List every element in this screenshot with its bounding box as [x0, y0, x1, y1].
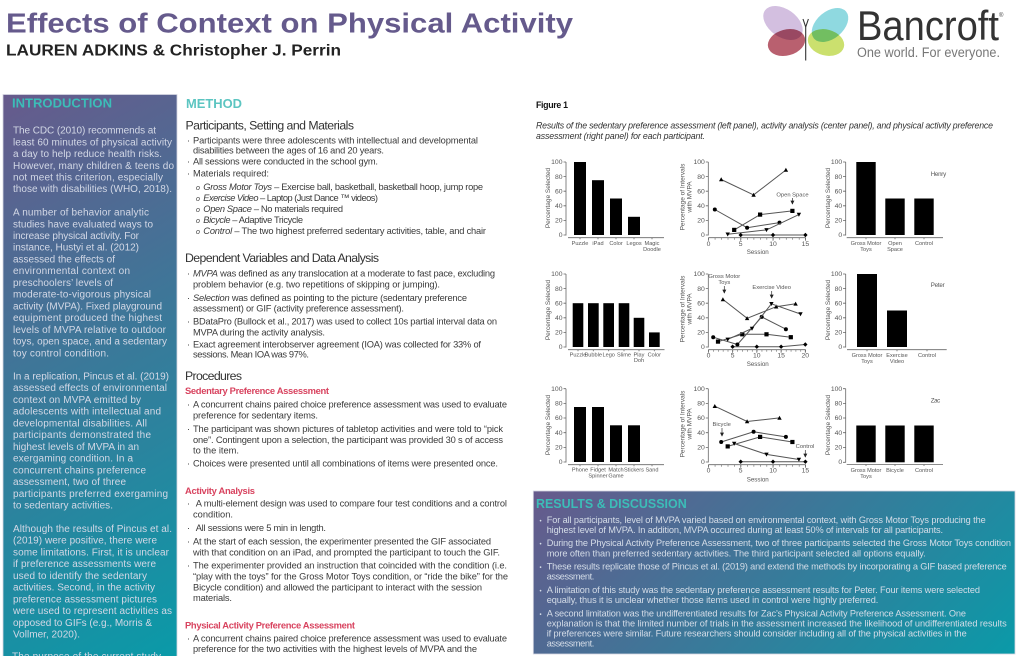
chart: Zac activity analysis: Control [796, 444, 814, 450]
chart: Henry physical activity preference: 60 [835, 188, 842, 195]
dependent variable bullets: Selection was defined as pointing to the picture (sedentary preference [193, 293, 467, 303]
chart: Peter sedentary preference: Lego [602, 353, 615, 359]
chart: Peter activity analysis: with MVPA [686, 293, 694, 326]
chart: Henry sedentary preference: 100 [551, 159, 563, 166]
paragraph: limitations: opposed to GIFs (e.g., Morris & [13, 618, 152, 629]
sedentary bullets [187, 400, 507, 469]
dependent variable bullets: MVPA during the activity analysis. [193, 327, 325, 337]
introduction background [3, 94, 177, 656]
dependent variable bullets: · [187, 317, 190, 327]
paragraph: Pincus replication: highest levels of MVPA in an [13, 442, 139, 453]
result: first limitation [540, 585, 980, 605]
chart: Henry activity analysis: 80 [697, 174, 705, 181]
materials list: Bicycle – Adaptive Tricycle [203, 215, 303, 225]
activity analysis bullets: The experimenter provided an instruction that coincided with the condition (i.e. [193, 560, 507, 570]
logo tagline: One world. For everyone. [857, 45, 1000, 60]
chart: Henry sedentary preference: Puzzle [572, 241, 588, 247]
chart: Peter sedentary preference: Puzzle [570, 353, 586, 359]
chart: Henry physical activity preference: 100 [831, 159, 842, 166]
activity analysis bullets: “play with the toys” for the Gross Motor Toys condition, or “ride the bike” for the [193, 571, 508, 581]
chart: Henry physical activity preference [825, 159, 947, 253]
chart: Henry activity analysis: 0 [707, 241, 711, 248]
chart: Peter physical activity preference: Exercise [886, 353, 908, 359]
paragraph: Pincus replication: concurrent chains preference [13, 466, 146, 476]
sedentary bullets: · [187, 424, 190, 434]
paragraph: Pincus replication: exergaming condition. In a [13, 454, 133, 465]
panel: introduction [3, 94, 177, 656]
chart: Zac activity analysis: 60 [697, 415, 705, 422]
chart: Henry sedentary preference: Percentage Selected [545, 167, 552, 228]
chart: Zac sedentary preference: Stickers [624, 468, 644, 474]
chart: Henry activity analysis: Open Space [776, 192, 809, 198]
chart: Peter sedentary preference: 60 [555, 300, 563, 307]
activity analysis bullets: · [187, 560, 190, 570]
chart: Henry sedentary preference: 40 [555, 203, 563, 210]
dependent variable bullets: BDataPro (Bullock et al., 2017) was used to collect 10s partial interval data on [193, 317, 497, 327]
chart: Peter sedentary preference: Color [648, 353, 661, 359]
activity analysis bullets: · [187, 499, 190, 509]
figure caption: Results of the sedentary preference assessment (left panel), activity analysis (center panel), and physical activity preference [536, 121, 993, 131]
result: preference assessment: • [540, 542, 542, 548]
chart: Zac sedentary preference: 0 [559, 459, 563, 466]
heading: activity analysis: Activity Analysis [185, 485, 255, 496]
chart: Zac activity analysis: 40 [697, 430, 705, 437]
figure heading: Figure 1 [536, 100, 568, 110]
result: preference assessment [540, 538, 1011, 558]
chart: Peter sedentary preference [545, 271, 664, 364]
result: replication: assessment. [547, 571, 594, 581]
chart: Peter sedentary preference: Slime [617, 353, 631, 359]
chart: Zac activity analysis: 5 [739, 468, 743, 474]
logo wordmark: Bancroft [857, 2, 999, 49]
chart: Henry activity analysis: 5 [739, 241, 743, 248]
chart: Peter physical activity preference [825, 271, 947, 365]
heading: method: METHOD [186, 97, 242, 111]
result: first limitation: A limitation of this study was the sedentary preference assessment results for Peter. Four items were selected [547, 585, 980, 595]
chart: Henry physical activity preference: Space [887, 247, 903, 253]
dependent variable bullets: assessment) or GIF (activity preference assessment). [193, 304, 404, 314]
paragraph: limitations: used to identify the sedentary [13, 571, 147, 582]
result: replication [540, 561, 1007, 581]
paragraph: Pincus replication: participants preferred exergaming [13, 489, 168, 500]
result: preference assessment: more often than preferred sedentary activities. The third participant selected all options equally. [547, 548, 926, 558]
chart: Henry physical activity preference: Gross Motor [851, 241, 882, 247]
chart: Peter activity analysis: 20 [802, 353, 809, 360]
chart: Zac sedentary preference: Phone [572, 468, 588, 474]
paragraph: CDC recommendation: However, many children & teens do [13, 161, 174, 172]
chart: Zac sedentary preference: Game [608, 473, 624, 479]
chart: Zac sedentary preference: 80 [555, 401, 563, 408]
dependent variable bullets: · [187, 339, 190, 349]
dependent variable bullets: Exact agreement interobserver agreement (IOA) was collected for 33% of [193, 339, 481, 349]
paragraph: CDC recommendation: The CDC (2010) recommends at [13, 126, 156, 136]
chart: Peter physical activity preference: 60 [835, 300, 842, 307]
chart: Peter sedentary preference: Play [634, 353, 645, 359]
chart: Zac physical activity preference: Control [915, 468, 933, 474]
heading: sedentary preference assessment: Sedentary Preference Assessment [185, 385, 329, 396]
result: MVPA varied by context: For all participants, level of MVPA varied based on environmental context, with Gross Motor Toys producing the [547, 515, 986, 525]
chart: Peter sedentary preference: Doh [634, 358, 644, 364]
chart: Henry activity analysis: 20 [697, 218, 705, 225]
registered mark: ® [999, 12, 1004, 19]
paragraph: Pincus replication: context on MVPA emitted by [13, 395, 141, 406]
materials list: o [196, 185, 200, 192]
chart: Henry activity analysis: Session [747, 249, 769, 256]
chart: Henry physical activity preference: Open [888, 241, 902, 247]
chart: Peter physical activity preference: 40 [835, 315, 842, 322]
chart: Zac activity analysis: 100 [693, 386, 705, 393]
chart: Henry physical activity preference: 20 [835, 218, 842, 225]
heading: introduction: INTRODUCTION [12, 97, 112, 111]
chart: Zac physical activity preference: Toys [860, 474, 872, 480]
paragraph: Pincus replication: adolescents with intellectual and [13, 407, 161, 418]
paragraph: behavior analytic studies: activity (MVPA). Fixed playground [13, 301, 162, 312]
chart: Peter physical activity preference: Percentage Selected [825, 279, 832, 340]
sedentary bullets: preference for sedentary items. [193, 410, 318, 420]
chart: Peter activity analysis: 20 [697, 330, 705, 337]
materials list: Exercise Video – Laptop (Just Dance ™ videos) [203, 193, 378, 203]
activity analysis bullets: A multi-element design was used to compare four test conditions and a control [196, 499, 507, 509]
dependent variable bullets: · [187, 269, 190, 279]
logo: Bancroft [757, 0, 1004, 61]
chart: Henry sedentary preference: Magic [645, 241, 660, 247]
result: MVPA varied by context: highest level of MVPA. In addition, MVPA occurred during at least 50% of intervals for all participants. [547, 525, 943, 535]
chart: Henry sedentary preference: Color [609, 241, 623, 247]
chart: Zac activity analysis: Percentage of Intervals [680, 390, 686, 457]
chart: Henry activity analysis: 0 [701, 232, 705, 239]
chart: Zac activity analysis: with MVPA [686, 408, 694, 441]
sedentary bullets: A concurrent chains paired choice preference assessment was used to evaluate [193, 400, 507, 410]
materials list: o [196, 196, 200, 203]
chart: Zac sedentary preference: Fidget [590, 468, 606, 474]
paragraph: limitations: activities. Second, in the activity [13, 583, 155, 594]
chart: Peter activity analysis: Toys [718, 280, 730, 286]
authors: LAUREN ADKINS & Christopher J. Perrin [6, 42, 341, 60]
chart: Peter activity analysis: Session [747, 361, 769, 368]
paragraph: CDC recommendation: least 60 minutes of physical activity [13, 137, 172, 148]
paragraph: behavior analytic studies: studies have evaluated ways to [13, 219, 153, 230]
paragraph: CDC recommendation: not meet this criterion, especially [13, 172, 163, 184]
chart: Zac physical activity preference: 80 [835, 401, 842, 408]
chart: Peter activity analysis: 0 [707, 353, 711, 360]
chart: Peter sedentary preference: 80 [555, 286, 563, 293]
paragraph: behavior analytic studies: toys, open space, and a sedentary [13, 337, 167, 348]
heading: physical activity preference assessment: Physical Activity Preference Assessment [185, 619, 355, 630]
paragraph: limitations: were used to represent activities as [12, 606, 172, 617]
chart: Peter activity analysis: 5 [731, 353, 735, 360]
paragraph: Pincus replication: In a replication, Pincus et al. (2019) [13, 372, 169, 382]
chart: Peter physical activity preference: Control [918, 353, 936, 359]
result: second limitation [540, 609, 1007, 649]
result: second limitation: assessment. [547, 639, 594, 649]
participants bullets: · [187, 157, 190, 167]
chart: Peter physical activity preference: 100 [831, 271, 842, 278]
chart: Henry sedentary preference: Legos [626, 241, 642, 247]
chart: Zac sedentary preference: 20 [555, 445, 563, 452]
paragraph: limitations: (2019) were positive, there were [13, 536, 157, 547]
chart: Henry activity analysis: 60 [697, 188, 705, 195]
dependent variable bullets: MVPA was defined as any translocation at a moderate to fast pace, excluding [193, 269, 495, 279]
subheading: dependent variables: Dependent Variables and Data Analysis [185, 251, 379, 265]
chart: Henry sedentary preference: 0 [559, 232, 563, 239]
chart: Henry physical activity preference: Henry [931, 171, 947, 178]
paragraph: CDC recommendation: a day to help reduce health risks. [13, 149, 162, 160]
participants bullets: Participants were three adolescents with intellectual and developmental [193, 136, 478, 146]
chart: Henry activity analysis: 15 [802, 241, 809, 248]
figure caption: assessment (right panel) for each participant. [536, 131, 705, 141]
result: first limitation: equally, thus it is unclear whether those items used in control were highly preferred. [547, 595, 878, 605]
result: replication: • [540, 565, 542, 571]
chart: Henry sedentary preference [545, 159, 664, 253]
figure caption [536, 121, 993, 141]
chart: Peter physical activity preference: Toys [861, 359, 873, 365]
sedentary bullets: Choices were presented until all combinations of items were presented once. [193, 459, 498, 469]
chart: Peter activity analysis: 60 [697, 300, 705, 307]
paragraph: Pincus replication: to sedentary activities. [13, 501, 113, 512]
chart: Zac activity analysis: 10 [769, 468, 777, 474]
dependent variable bullets: problem behavior (e.g. two repetitions of skipping or jumping). [193, 279, 440, 289]
chart: Zac physical activity preference: Zac [931, 397, 940, 404]
chart: Peter sedentary preference: Percentage Selected [545, 279, 552, 340]
paragraph: limitations: Although the results of Pincus et al. [13, 524, 172, 535]
chart: Peter activity analysis: 15 [777, 353, 785, 360]
panel: method [185, 97, 508, 654]
chart: Peter activity analysis: 100 [693, 271, 705, 278]
chart: Zac physical activity preference: Percentage Selected [825, 394, 832, 455]
physical activity preference bullets: preference for the two activities with the highest levels of MVPA and the [193, 644, 477, 654]
dependent variable bullets: sessions. Mean IOA was 97%. [193, 350, 309, 360]
chart: Zac physical activity preference: 0 [838, 459, 842, 466]
heading: results and discussion: RESULTS & DISCUSSION [536, 497, 687, 511]
chart: Zac activity analysis: 15 [802, 468, 809, 474]
chart: Henry activity analysis [680, 159, 809, 256]
activity analysis bullets: materials. [193, 593, 232, 603]
chart: Peter sedentary preference: 20 [555, 330, 563, 337]
chart: Henry sedentary preference: iPad [592, 241, 604, 247]
paragraph: Pincus replication: assessed effects of environmental [13, 383, 167, 394]
participants bullets [187, 136, 478, 178]
paragraph: limitations [12, 524, 172, 641]
chart: Zac sedentary preference: 100 [551, 386, 563, 393]
chart: Peter activity analysis: 80 [697, 286, 705, 293]
chart: Peter physical activity preference: 20 [835, 330, 842, 337]
chart: Henry physical activity preference: 80 [835, 174, 842, 181]
chart: Zac sedentary preference: 40 [555, 430, 563, 437]
chart: Peter physical activity preference: Gross Motor [852, 353, 883, 359]
chart: Henry activity analysis: 100 [693, 159, 705, 166]
participants bullets: All sessions were conducted in the school gym. [193, 157, 378, 167]
paragraph: Pincus replication: participants demonstrated the [13, 430, 151, 441]
chart: Henry physical activity preference: Percentage Selected [825, 167, 832, 228]
chart: Zac physical activity preference: Bicycle [886, 468, 904, 474]
physical activity preference bullets: · [187, 633, 190, 643]
dependent variable bullets: · [187, 293, 190, 303]
chart: Henry sedentary preference: 20 [555, 218, 563, 225]
chart: Zac activity analysis [680, 386, 814, 484]
chart: Henry sedentary preference: 80 [555, 174, 563, 181]
chart: Peter physical activity preference: Video [890, 359, 904, 365]
materials list: Open Space – No materials required [203, 204, 343, 214]
chart: Peter activity analysis: Gross Motor [708, 274, 740, 280]
chart: Henry sedentary preference: 60 [555, 188, 563, 195]
chart: Peter sedentary preference: Bubble [585, 353, 602, 359]
materials list: Control – The two highest preferred sedentary activities, table, and chair [203, 226, 486, 236]
chart: Zac sedentary preference: 60 [555, 415, 563, 422]
chart: Henry activity analysis: Percentage of Intervals [680, 163, 686, 230]
paragraph: Pincus replication [13, 372, 169, 512]
paragraph: behavior analytic studies: A number of behavior analytic [13, 208, 149, 218]
chart: Zac activity analysis: 0 [701, 459, 705, 466]
subheading: procedures: Procedures [185, 369, 242, 383]
result: MVPA varied by context [540, 515, 986, 535]
chart: Zac physical activity preference: 40 [835, 430, 842, 437]
chart: Zac sedentary preference: Percentage Selected [545, 394, 552, 455]
chart: Peter activity analysis: Percentage of Intervals [680, 275, 686, 342]
chart: Peter activity analysis [680, 271, 809, 368]
chart: Zac activity analysis: 80 [697, 401, 705, 408]
chart: Henry sedentary preference: Doodle [643, 247, 661, 253]
activity analysis bullets [187, 499, 508, 603]
sedentary bullets: · [187, 459, 190, 469]
physical activity preference bullets: A concurrent chains paired choice preference assessment was used to evaluate [193, 633, 507, 643]
paragraph: behavior analytic studies: equipment produced the highest [13, 313, 162, 324]
paragraph: behavior analytic studies: levels of MVPA relative to outdoor [13, 325, 167, 336]
sedentary bullets: one”. Contingent upon a selection, the participant was provided 30 s of access [193, 435, 503, 445]
activity analysis bullets: with that condition on an iPad, and prompted the participant to touch the GIF. [192, 547, 500, 557]
activity analysis bullets: condition. [193, 509, 233, 519]
sedentary bullets: · [187, 400, 190, 410]
activity analysis bullets: At the start of each session, the experimenter presented the GIF associated [193, 537, 491, 547]
chart: Zac sedentary preference: Match [608, 468, 624, 474]
chart: Henry physical activity preference: 0 [838, 232, 842, 239]
title: Effects of Context on Physical Activity [6, 8, 573, 38]
paragraph: behavior analytic studies: toy control condition. [13, 348, 109, 359]
chart: Peter physical activity preference: Peter [931, 282, 945, 289]
result: second limitation: explanation is that the limited number of trials in the assessment increased the likelihood of undifferentiated results [547, 619, 1007, 629]
paragraph: behavior analytic studies: environmental context on [13, 266, 130, 277]
chart: Zac activity analysis: Session [747, 477, 769, 484]
result: replication: These results replicate those of Pincus et al. (2019) and extend the methods by incorporating a GIF based preference [547, 561, 1007, 571]
materials list: o [196, 218, 200, 225]
sedentary bullets: The participant was shown pictures of tabletop activities and were told to “pick [193, 424, 503, 434]
activity analysis bullets: · [187, 523, 190, 533]
icon: butterfly [757, 0, 855, 61]
result: second limitation: if preferences were similar. Future researchers should consider including all of the physical activities in the [547, 629, 967, 639]
chart: Peter sedentary preference: 0 [559, 344, 563, 351]
chart: Zac activity analysis: 20 [697, 445, 705, 452]
physical activity preference bullets [187, 633, 507, 654]
chart: Zac activity analysis: Bicycle [713, 422, 731, 428]
paragraph: limitations: Vollmer, 2020). [13, 630, 80, 641]
chart: Henry physical activity preference: 40 [835, 203, 842, 210]
paragraph: behavior analytic studies [13, 208, 167, 359]
chart: Zac sedentary preference: Spinner [588, 473, 608, 479]
paragraph: Pincus replication: developmental disabilities. All [13, 418, 147, 430]
materials list: o [196, 207, 200, 214]
chart: Peter activity analysis: 40 [697, 315, 705, 322]
materials list [196, 182, 486, 236]
paragraph: behavior analytic studies: increase physical activity. For [13, 231, 140, 242]
chart: Peter activity analysis: Exercise Video [752, 285, 791, 291]
paragraph: CDC recommendation: those with disabilities (WHO, 2018). [13, 184, 172, 195]
chart: Peter activity analysis: 10 [753, 353, 761, 360]
materials list: Gross Motor Toys – Exercise ball, basketball, basketball hoop, jump rope [203, 182, 483, 192]
chart: Henry activity analysis: 40 [697, 203, 705, 210]
paragraph: behavior analytic studies: assessed the effects of [13, 254, 115, 265]
chart: Henry activity analysis: with MVPA [686, 181, 694, 214]
paragraph: CDC recommendation [13, 126, 174, 195]
result: preference assessment: During the Physical Activity Preference Assessment, two of three participants selected the Gross Motor Toys condition [547, 538, 1011, 548]
paragraph: Pincus replication: assessment, two of three [13, 477, 126, 488]
panel: results and discussion [533, 491, 1015, 654]
participants bullets: · [187, 136, 190, 146]
result: second limitation: A second limitation was the undifferentiated results for Zac’s Physical Activity Preference Assessment. One [547, 609, 966, 619]
paragraph: behavior analytic studies: instance, Hustyi et al. (2012) [13, 243, 139, 254]
chart: Peter sedentary preference: 100 [551, 271, 563, 278]
chart: Zac physical activity preference: 100 [831, 386, 842, 393]
chart: Zac sedentary preference: Sand [645, 468, 659, 474]
chart: Peter physical activity preference: 0 [838, 344, 842, 351]
chart: Peter sedentary preference: 40 [555, 315, 563, 322]
participants bullets: disabilities between the ages of 16 and 20 years. [193, 146, 384, 156]
participants bullets: · [187, 168, 190, 178]
chart: Peter activity analysis: 0 [701, 344, 705, 351]
chart: Henry activity analysis: 10 [769, 241, 777, 248]
activity analysis bullets: Bicycle condition) and allowed the participant to interact with the session [193, 582, 482, 592]
dependent variable bullets [187, 269, 497, 360]
paragraph: behavior analytic studies: preschoolers’ levels of [13, 278, 113, 289]
chart: Zac physical activity preference: 20 [835, 445, 842, 452]
chart: Zac physical activity preference [825, 386, 943, 480]
paragraph: limitations: some limitations. First, it is unclear [13, 548, 170, 558]
result: first limitation: • [540, 589, 542, 595]
chart: Peter physical activity preference: 80 [835, 286, 842, 293]
activity analysis bullets: All sessions were 5 min in length. [196, 523, 326, 533]
chart: Zac physical activity preference: 60 [835, 415, 842, 422]
chart: Zac physical activity preference: Gross Motor [851, 468, 882, 474]
sedentary bullets: to the item. [193, 446, 239, 456]
chart: Henry physical activity preference: Toys [860, 247, 872, 253]
participants bullets: Materials required: [193, 168, 269, 178]
paragraph: limitations: preference assessment pictures [13, 594, 157, 606]
chart: Zac activity analysis: 0 [707, 468, 711, 474]
materials list: o [196, 229, 200, 236]
paragraph: limitations: if preference assessments were [13, 559, 156, 570]
results background [533, 491, 1015, 654]
subheading: participants: Participants, Setting and Materials [186, 118, 354, 132]
activity analysis bullets: · [187, 537, 190, 547]
result: MVPA varied by context: • [540, 519, 542, 525]
chart: Zac sedentary preference [545, 386, 664, 479]
chart: Henry physical activity preference: Control [915, 241, 933, 247]
result: second limitation: • [540, 613, 542, 619]
paragraph: behavior analytic studies: moderate-to-vigorous physical [13, 290, 151, 301]
